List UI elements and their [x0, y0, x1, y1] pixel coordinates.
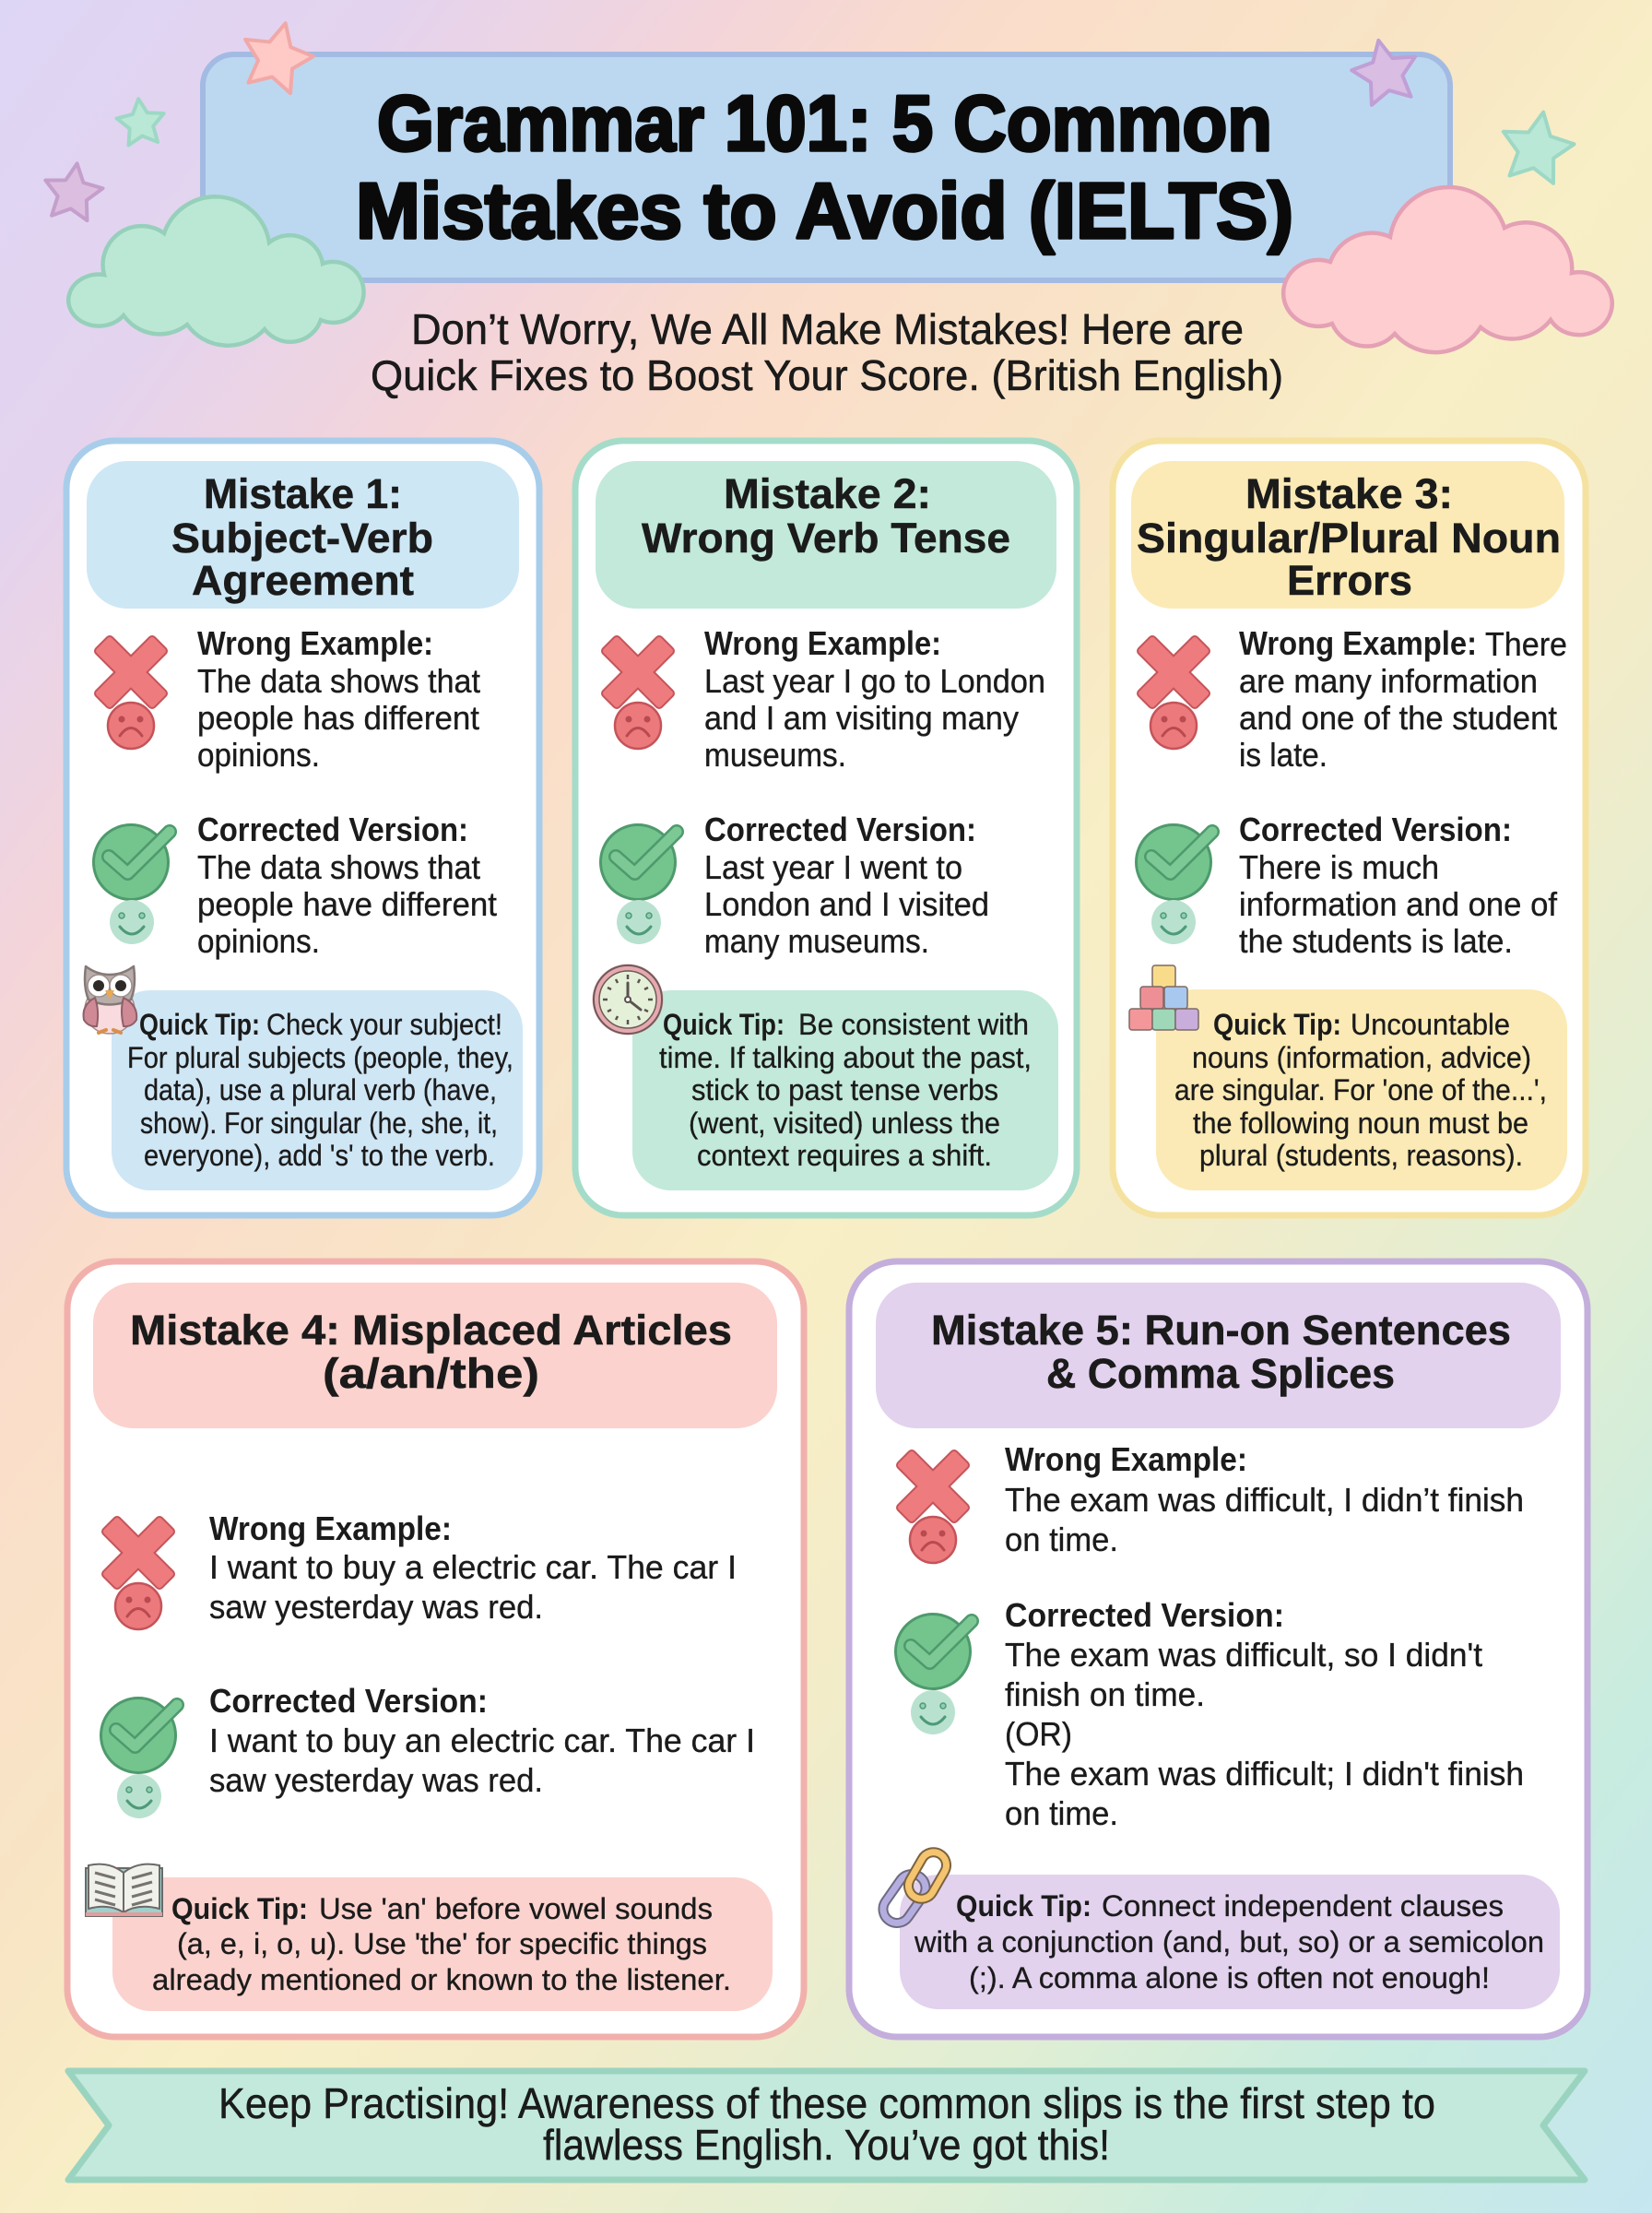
heading: mistake 1: Subject-Verb	[171, 515, 433, 562]
quick tip	[112, 990, 523, 1190]
heading: mistake 4	[93, 1283, 777, 1428]
heading: mistake 5: & Comma Splices	[1046, 1350, 1395, 1397]
wrong example text	[197, 624, 480, 774]
star: small mint	[115, 96, 167, 146]
corrected version text: The data shows that	[197, 848, 480, 886]
corrected version text: saw yesterday was red.	[209, 1761, 543, 1799]
corrected version text	[704, 811, 989, 960]
corrected version text: people have different	[197, 885, 497, 923]
footer message: Keep Practising! Awareness of these common slips is the first step to	[218, 2079, 1435, 2127]
icon: green check	[1136, 824, 1212, 900]
wrong example text: is late.	[1239, 736, 1328, 774]
star: mint right	[1496, 106, 1579, 185]
quick tip: context requires a shift.	[697, 1139, 992, 1172]
icon: wrong cross with sad face	[99, 640, 163, 749]
wrong example text	[704, 624, 1045, 774]
wrong example text: and one of the student	[1239, 699, 1557, 737]
corrected version text: Corrected Version:	[704, 811, 976, 848]
quick tip: Quick Tip:	[956, 1889, 1092, 1923]
quick tip: show). For singular (he, she, it,	[140, 1106, 498, 1140]
icon: clock	[594, 965, 662, 1034]
quick tip	[900, 1875, 1560, 2009]
quick tip: Use 'an' before vowel sounds	[319, 1892, 713, 1925]
icon: green check	[896, 1614, 972, 1689]
corrected version text	[197, 811, 497, 960]
panel: mistake 4	[67, 1261, 804, 2037]
icon: wrong cross with sad face	[106, 1521, 171, 1629]
corrected version text: information and one of	[1239, 885, 1558, 923]
icon: chain links	[878, 1848, 951, 1928]
quick tip: Check your subject!	[266, 1008, 502, 1041]
wrong example text: I want to buy a electric car. The car I	[209, 1548, 737, 1586]
quick tip	[112, 1877, 773, 2011]
heading: mistake 2: Wrong Verb Tense	[642, 515, 1010, 562]
heading: mistake 1	[87, 461, 519, 609]
quick tip: nouns (information, advice)	[1192, 1041, 1531, 1074]
icon: toy blocks	[1129, 965, 1198, 1030]
wrong example text: are many information	[1239, 662, 1538, 700]
heading: mistake 3: Errors	[1287, 557, 1412, 604]
corrected version text: Corrected Version:	[209, 1682, 488, 1720]
quick tip	[1156, 989, 1567, 1190]
corrected version text	[209, 1682, 755, 1799]
corrected version text: the students is late.	[1239, 922, 1513, 960]
heading: mistake 5	[876, 1283, 1561, 1428]
quick tip: Connect independent clauses	[1102, 1889, 1504, 1923]
title text: Grammar 101: 5 Common	[377, 80, 1272, 168]
heading: mistake 1: Agreement	[192, 557, 414, 604]
cloud: green	[68, 196, 364, 346]
corrected version text: finish on time.	[1005, 1675, 1205, 1713]
quick tip: For plural subjects (people, they,	[127, 1041, 513, 1074]
quick tip: Uncountable	[1351, 1008, 1510, 1041]
wrong example text	[1005, 1440, 1524, 1558]
heading: mistake 5: Mistake 5: Run-on Sentences	[931, 1307, 1511, 1354]
wrong example text: Wrong Example:	[704, 624, 941, 662]
wrong example text: Wrong Example:	[1239, 624, 1477, 662]
panel: mistake 3	[1113, 441, 1586, 1215]
wrong example text: saw yesterday was red.	[209, 1588, 543, 1626]
star: small purple	[41, 160, 106, 222]
subtitle	[371, 305, 1283, 399]
quick tip: everyone), add 's' to the verb.	[144, 1139, 495, 1172]
title text: Mistakes to Avoid (IELTS)	[356, 168, 1293, 255]
wrong example text: museums.	[704, 736, 846, 774]
heading: mistake 1: Mistake 1:	[204, 470, 402, 517]
wrong example text	[1239, 624, 1567, 774]
title banner	[203, 54, 1450, 280]
panel: mistake 1	[66, 441, 539, 1215]
corrected version text: opinions.	[197, 922, 320, 960]
icon: wrong cross with sad face	[901, 1454, 965, 1563]
corrected version text	[1005, 1596, 1524, 1832]
heading: mistake 3: Singular/Plural Noun	[1137, 515, 1561, 562]
corrected version text: I want to buy an electric car. The car I	[209, 1722, 755, 1759]
icon: open book	[86, 1864, 162, 1916]
quick tip: (went, visited) unless the	[689, 1106, 1000, 1140]
icon: smiley	[617, 900, 661, 944]
icon: wrong cross with sad face	[606, 640, 670, 749]
quick tip: Quick Tip:	[171, 1892, 308, 1925]
corrected version text: Last year I went to	[704, 848, 962, 886]
subtitle: Don’t Worry, We All Make Mistakes! Here are	[411, 305, 1244, 353]
footer message: flawless English. You’ve got this!	[543, 2121, 1110, 2169]
quick tip: (a, e, i, o, u). Use 'the' for specific things	[177, 1927, 707, 1960]
wrong example text	[209, 1509, 737, 1626]
wrong example text: Wrong Example:	[1005, 1440, 1247, 1478]
wrong example text: The exam was difficult, I didn’t finish	[1005, 1481, 1524, 1519]
quick tip: Be consistent with	[798, 1008, 1029, 1041]
icon: smiley	[1151, 900, 1196, 944]
wrong example text: people has different	[197, 699, 479, 737]
corrected version text: Corrected Version:	[1239, 811, 1512, 848]
corrected version text: The exam was difficult; I didn't finish	[1005, 1755, 1524, 1793]
icon: owl	[83, 966, 136, 1034]
quick tip: the following noun must be	[1193, 1106, 1528, 1140]
quick tip: (;). A comma alone is often not enough!	[969, 1961, 1490, 1994]
subtitle: Quick Fixes to Boost Your Score. (British English)	[371, 351, 1283, 399]
icon: green check	[601, 824, 677, 900]
quick tip: time. If talking about the past,	[659, 1041, 1032, 1074]
quick tip: are singular. For 'one of the...',	[1174, 1073, 1547, 1106]
corrected version text: many museums.	[704, 922, 929, 960]
footer message	[218, 2079, 1435, 2169]
quick tip: plural (students, reasons).	[1199, 1139, 1523, 1172]
icon: green check	[94, 824, 170, 900]
heading: mistake 2	[596, 461, 1056, 609]
corrected version text: London and I visited	[704, 885, 989, 923]
wrong example text: Wrong Example:	[197, 624, 433, 662]
wrong example text: The data shows that	[197, 662, 480, 700]
quick tip: Quick Tip:	[663, 1008, 785, 1041]
quick tip: Quick Tip:	[1213, 1008, 1341, 1041]
corrected version text: (OR)	[1005, 1715, 1072, 1753]
icon: smiley	[117, 1774, 161, 1818]
title text	[356, 80, 1293, 255]
quick tip: with a conjunction (and, but, so) or a semicolon	[914, 1925, 1544, 1959]
quick tip: stick to past tense verbs	[691, 1073, 998, 1106]
wrong example text: There	[1485, 625, 1567, 663]
heading: mistake 4: Mistake 4: Misplaced Articles	[130, 1307, 732, 1354]
quick tip: already mentioned or known to the listener.	[152, 1963, 731, 1996]
wrong example text: and I am visiting many	[704, 699, 1019, 737]
corrected version text	[1239, 811, 1558, 960]
heading: mistake 3: Mistake 3:	[1245, 470, 1453, 517]
corrected version text: Corrected Version:	[1005, 1596, 1284, 1634]
cloud: pink	[1283, 187, 1612, 352]
icon: smiley	[911, 1690, 955, 1734]
panel: mistake 2	[575, 441, 1077, 1215]
wrong example text: on time.	[1005, 1521, 1118, 1558]
footer ribbon	[68, 2071, 1585, 2180]
wrong example text: Last year I go to London	[704, 662, 1045, 700]
wrong example text: Wrong Example:	[209, 1509, 452, 1547]
star: purple top right	[1347, 33, 1423, 108]
star: pink	[235, 15, 320, 97]
wrong example text: opinions.	[197, 736, 320, 774]
corrected version text: on time.	[1005, 1794, 1118, 1832]
heading: mistake 3	[1131, 461, 1564, 609]
corrected version text: Corrected Version:	[197, 811, 468, 848]
icon: green check	[101, 1698, 177, 1772]
quick tip: data), use a plural verb (have,	[144, 1073, 497, 1106]
icon: wrong cross with sad face	[1141, 640, 1206, 749]
panel: mistake 5	[849, 1261, 1587, 2037]
quick tip	[632, 990, 1058, 1190]
corrected version text: There is much	[1239, 848, 1439, 886]
heading: mistake 4: (a/an/the)	[323, 1350, 539, 1397]
icon: smiley	[110, 900, 154, 944]
corrected version text: The exam was difficult, so I didn't	[1005, 1636, 1482, 1674]
heading: mistake 2: Mistake 2:	[724, 470, 931, 517]
quick tip: Quick Tip:	[139, 1008, 260, 1041]
